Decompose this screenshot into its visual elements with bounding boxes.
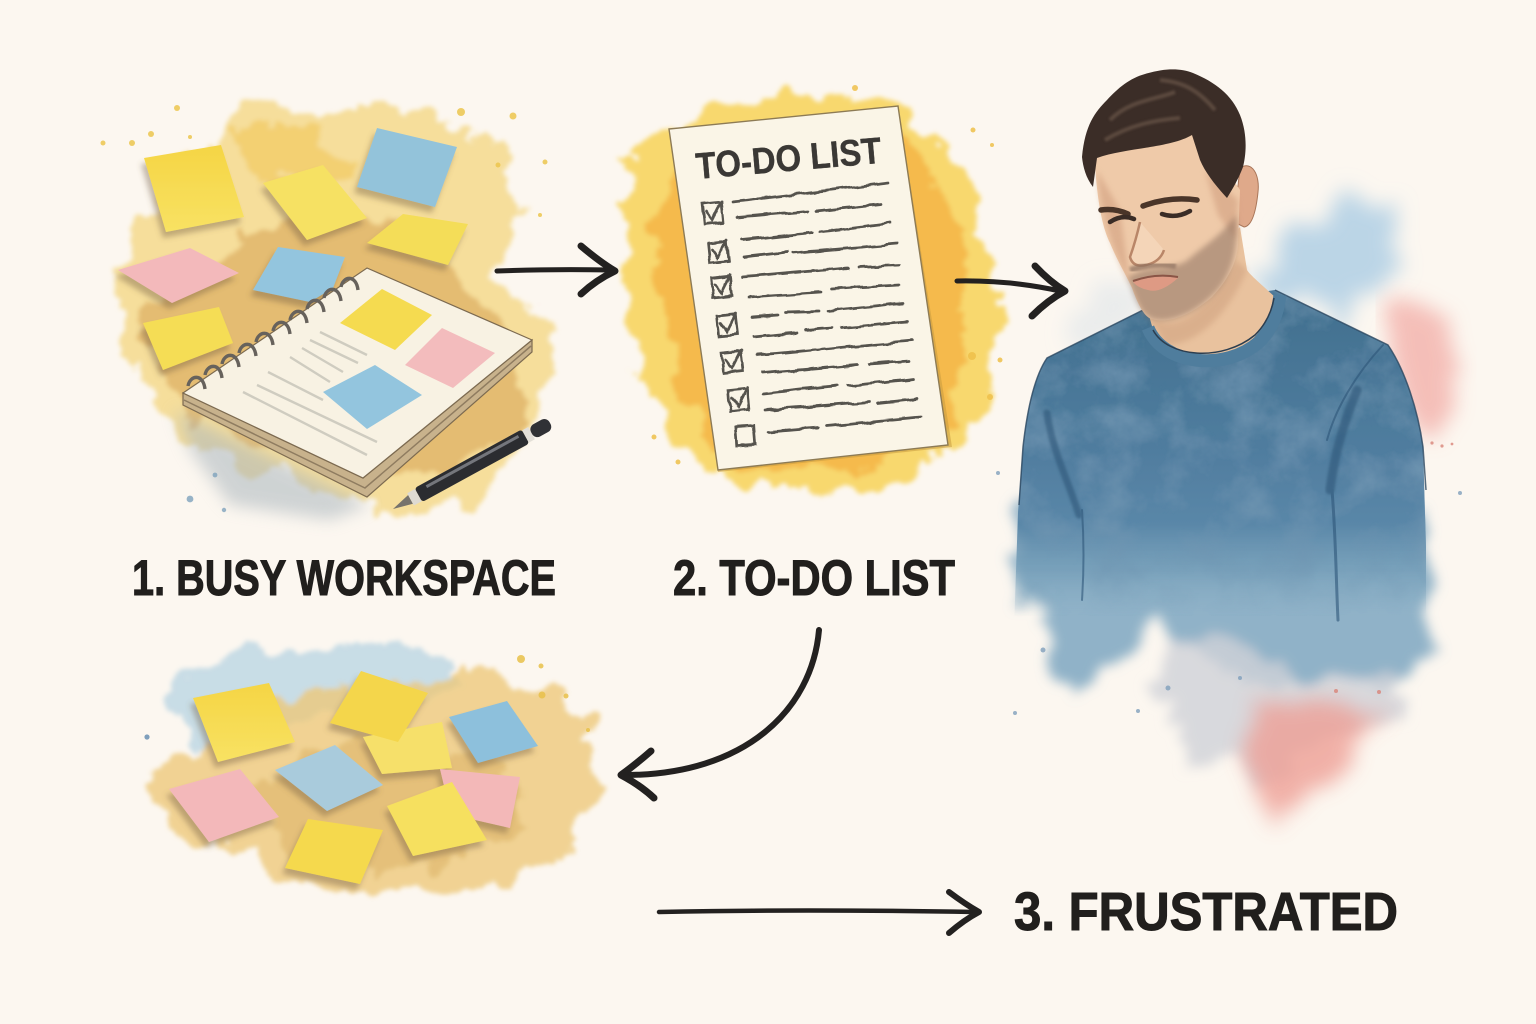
watercolor wash: pink lower [1245,695,1395,830]
checklist row 3 [711,265,899,298]
paint splatter: blue [144,734,150,740]
forehead and cheek shading [1097,170,1238,285]
spiral binding [188,278,358,389]
arrow: to-do list to person [957,266,1065,316]
watercolor wash: scattered notes [150,640,600,890]
sticky note: yellow bottom right [387,782,487,856]
sticky note: yellow bottom left [285,819,383,884]
face: brows [1101,199,1197,214]
checklist row 5 [722,341,912,373]
sticky note on notebook: pink [405,328,495,388]
checklist row 1 [702,183,889,224]
paper sheet [669,106,952,472]
arrow: curved to scattered notes [621,630,819,798]
panel: frustrated person illustration [996,69,1462,830]
sticky note: yellow top centre [330,671,428,742]
paint splatter: red [1334,441,1453,694]
face: eyes [1110,211,1190,222]
paint splatter [100,105,548,217]
sticky notes: scattered [169,671,538,884]
sticky note: pink right [440,769,520,828]
panel: scattered sticky notes illustration [144,640,600,890]
sweater [1014,290,1426,630]
sticky note: yellow top left [144,145,244,232]
ear [1234,166,1258,227]
watercolor wash: blue behind person [1065,195,1395,360]
sticky note: pink left [169,769,279,842]
paint splatter [652,85,1002,464]
neck [1146,227,1275,359]
sticky notes: loose on desk [118,128,468,370]
neck shadow [1150,260,1247,345]
face: nose [1130,222,1164,266]
icon: pen [389,416,554,516]
sticky note on notebook: blue [323,365,422,429]
label: step 3: 3. FRUSTRATED [1014,882,1398,942]
checklist row 2 [708,223,897,263]
paint splatter: blue [187,473,226,512]
to-do heading: TO-DO LIST [694,130,883,187]
sticky note on notebook: yellow [340,289,432,350]
sticky note: yellow top left [193,683,295,762]
head [1095,130,1240,320]
paint splatter [996,471,1462,715]
checklist row 4 [717,303,906,337]
watercolor wash: workspace [115,95,555,520]
sweater outline [1019,290,1426,505]
sticky note: blue centre [253,247,345,302]
checklist row 7 [735,417,920,447]
sweater collar [1148,295,1280,361]
panel: busy workspace illustration [100,95,555,520]
arrow: to frustrated label [659,892,979,933]
stubble [1128,215,1237,321]
sticky note: blue top right [357,128,457,207]
hair [1082,69,1246,198]
watercolor wash: to-do [625,90,1000,490]
arrow: workspace to to-do list [497,246,615,294]
watercolor wash: pink upper right [1390,305,1462,440]
sticky note: blue right [449,701,538,763]
label: step 2: 2. TO-DO LIST [673,550,955,606]
sticky note: yellow right [367,214,468,265]
sticky note: blue centre [275,745,383,811]
watercolor wash: lower sweater fade [1010,510,1428,790]
paint splatter [517,655,590,732]
panel: to-do list illustration [625,85,1002,490]
sticky note: pale yellow middle [363,722,452,774]
label: step 1: 1. BUSY WORKSPACE [132,550,556,606]
sticky note: yellow lower left [143,307,233,370]
checklist [702,183,920,447]
sweater folds [1047,345,1383,620]
face: mouth [1130,265,1178,291]
notebook [183,268,532,497]
sticky note: pink left [118,248,239,303]
checklist row 6 [728,379,917,411]
sticky note: yellow top centre [263,165,367,240]
